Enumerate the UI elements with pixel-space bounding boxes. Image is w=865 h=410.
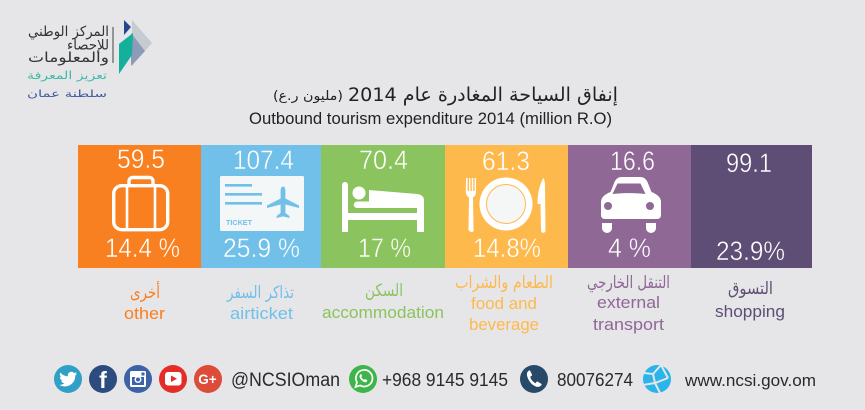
value: 70.4 [359,145,408,175]
icon: phone [520,365,548,393]
percentage: 25.9 % [223,233,300,263]
toll-free number: 80076274 [557,370,633,390]
panel: food and beverage [445,145,568,268]
icon: instagram [124,365,152,393]
label: external transport: external [597,293,660,312]
icon: suitcase [114,178,168,230]
logo: NCSI [27,20,152,100]
icon: google plus: G+ [198,372,217,387]
logo wordmark: تعزيز المعرفة [27,69,107,82]
label: external transport [587,273,670,334]
icon: facebook [89,365,117,393]
label: food and beverage: الطعام والشراب [455,273,553,293]
Arabic title: إنفاق السياحة المغادرة عام 2014 [348,84,618,107]
Arabic title: (مليون ر.ع) [273,89,343,104]
value: 59.5 [117,144,165,174]
footer: contact bar [54,365,816,393]
icon: plate with cutlery [466,178,546,233]
label: food and beverage: beverage [469,315,539,334]
label: shopping: التسوق [728,279,773,299]
percentage: 17 % [358,233,411,263]
icon: bed [342,182,424,232]
handle: @NCSIOman [231,370,340,391]
label: accommodation: accommodation [322,303,444,322]
logo mark [112,20,152,74]
logo wordmark: للإحصاء [67,38,109,54]
value: 16.6 [610,146,655,176]
value: 107.4 [233,145,294,175]
logo wordmark: سلطنة عمان [27,89,107,100]
label: external transport: transport [593,315,664,334]
label: airticket: تذاكر السفر [226,283,294,303]
panel: air ticket [201,145,321,268]
logo wordmark: والمعلومات [28,50,109,66]
value: 99.1 [726,148,772,178]
icon: facebook: f [99,367,107,393]
icon: car [601,177,661,233]
icon: twitter [54,365,82,393]
icon: globe [643,365,671,393]
icon: youtube [159,365,187,393]
percentage: 4 % [608,233,651,263]
English title: Outbound tourism expenditure 2014 (million R.O) [249,109,612,128]
label: food and beverage [455,273,553,334]
label: other [124,281,165,323]
panel: accommodation [321,145,445,268]
label: airticket [226,283,294,323]
phone number: +968 9145 9145 [382,370,508,390]
icon: ticket: TICKET [226,218,252,227]
panel: shopping [691,145,812,268]
panel: other [78,144,201,268]
title [249,84,618,128]
label: food and beverage: food and [471,294,537,313]
value: 61.3 [482,146,530,176]
logo wordmark [27,24,109,100]
label: other: other [124,304,165,323]
label: other: أخرى [130,281,160,303]
percentage: 23.9% [716,236,785,266]
website: www.ncsi.gov.om [684,371,816,390]
label: shopping [715,279,785,321]
icon: whatsapp [349,365,377,393]
label: shopping: shopping [715,302,785,321]
logo wordmark: المركز الوطني [28,24,109,40]
label: accommodation [322,281,444,322]
label: external transport: التنقل الخارجي [587,273,670,293]
label: airticket: airticket [230,304,293,323]
icon: google plus [194,365,222,393]
label: accommodation: السكن [365,281,403,301]
percentage: 14.8% [473,233,541,263]
panel: external transport [568,145,691,268]
percentage: 14.4 % [105,233,180,263]
